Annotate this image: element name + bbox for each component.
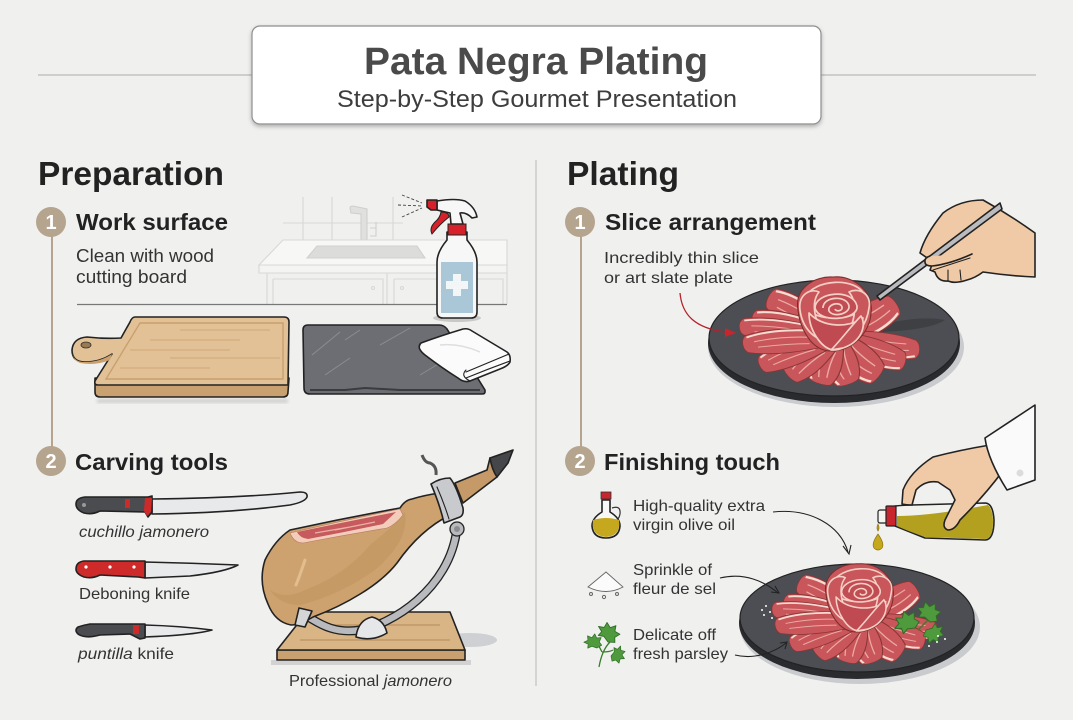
label: olive oil: virgin olive oil bbox=[633, 517, 735, 534]
cut face bbox=[290, 509, 403, 543]
step connector bbox=[580, 236, 582, 448]
salt flakes bbox=[761, 605, 946, 647]
panel: preparation bbox=[36, 155, 513, 690]
icon: salt pile bbox=[588, 572, 623, 599]
step 1 text: Clean with wood bbox=[76, 246, 214, 266]
label: deboning knife: Deboning knife bbox=[79, 586, 190, 603]
arrow: parsley to plate bbox=[735, 642, 787, 657]
heading: preparation: Preparation bbox=[38, 155, 224, 192]
rose slices bbox=[771, 564, 939, 667]
step 1 text bbox=[604, 250, 759, 287]
arrow: to slate plate bbox=[680, 293, 736, 337]
step 1 text: cutting board bbox=[76, 267, 187, 287]
step 1 badge bbox=[36, 207, 66, 237]
arrow: oil to plate bbox=[773, 511, 851, 554]
front clip bbox=[295, 608, 312, 627]
bottle bbox=[878, 503, 994, 540]
arrow: salt to plate bbox=[720, 576, 779, 593]
label: olive oil: High-quality extra bbox=[633, 498, 765, 515]
step 1 badge bbox=[565, 207, 595, 237]
column divider bbox=[535, 160, 537, 686]
plate with rose of ham bbox=[708, 277, 964, 407]
plate with garnished rose bbox=[739, 564, 980, 684]
icon: deboning knife bbox=[76, 561, 238, 578]
step 2 badge: 2 bbox=[45, 451, 57, 473]
title card bbox=[252, 26, 821, 124]
label: parsley: fresh parsley bbox=[633, 646, 728, 663]
hand bbox=[902, 445, 1002, 530]
step 2 heading: Carving tools bbox=[75, 449, 228, 475]
icon: hand with tweezers bbox=[877, 200, 1035, 300]
fingers under bottle bbox=[904, 524, 925, 533]
panel: plating bbox=[565, 155, 1035, 684]
step 1 text bbox=[76, 246, 214, 287]
clamp ring bbox=[431, 478, 464, 536]
step 1 text: Incredibly thin slice bbox=[604, 250, 759, 267]
rose slices bbox=[738, 277, 921, 389]
icon: parsley bbox=[582, 620, 626, 667]
towel bbox=[419, 329, 510, 382]
label: fleur de sel bbox=[633, 562, 716, 598]
step 2 badge: 2 bbox=[574, 451, 586, 473]
icon: cuchillo jamonero knife bbox=[76, 492, 307, 517]
step connector bbox=[51, 236, 53, 448]
icon: wooden cutting board bbox=[72, 317, 289, 403]
oil drop bbox=[873, 524, 883, 550]
label: olive oil bbox=[633, 498, 765, 534]
caption: professional jamonero: Professional jamonero bbox=[289, 673, 452, 690]
icon: puntilla knife bbox=[76, 624, 212, 639]
cuff bbox=[985, 405, 1035, 490]
step 1 badge: 1 bbox=[574, 212, 586, 234]
icon: spray bottle bbox=[398, 195, 481, 322]
label: cuchillo jamonero: cuchillo jamonero bbox=[79, 524, 209, 541]
label: parsley: Delicate off bbox=[633, 627, 717, 644]
parsley garnish bbox=[890, 601, 948, 647]
counter edge bbox=[77, 304, 507, 306]
step 1 heading: Work surface bbox=[76, 209, 228, 235]
ham leg bbox=[262, 493, 450, 625]
step 1 heading: Slice arrangement bbox=[605, 209, 816, 235]
step 2 badge bbox=[36, 446, 66, 476]
label: fleur de sel: Sprinkle of bbox=[633, 562, 713, 579]
label: puntilla knife: puntilla knife bbox=[77, 646, 174, 663]
subtitle: Step-by-Step Gourmet Presentation bbox=[337, 86, 737, 113]
title: Pata Negra Plating bbox=[364, 41, 708, 83]
hook bbox=[422, 455, 436, 475]
icon: ham on jamonero stand bbox=[262, 450, 513, 665]
step 1 badge: 1 bbox=[45, 212, 57, 234]
step 2 heading: Finishing touch bbox=[604, 449, 780, 475]
header rule bbox=[38, 74, 1036, 76]
hoof and shank bbox=[455, 450, 513, 503]
step 2 badge bbox=[565, 446, 595, 476]
icon: slate board with towel bbox=[303, 325, 510, 394]
stand arc bbox=[310, 528, 457, 631]
kitchen sink backdrop bbox=[259, 197, 507, 304]
icon: oil jar bbox=[592, 492, 620, 538]
label: fleur de sel: fleur de sel bbox=[633, 581, 716, 598]
stand base bbox=[271, 612, 497, 665]
heading: plating: Plating bbox=[567, 155, 679, 192]
step 1 text: or art slate plate bbox=[604, 270, 733, 287]
pivot dome bbox=[356, 617, 387, 639]
label: parsley bbox=[633, 627, 728, 663]
icon: hand pouring olive oil bbox=[873, 405, 1035, 550]
